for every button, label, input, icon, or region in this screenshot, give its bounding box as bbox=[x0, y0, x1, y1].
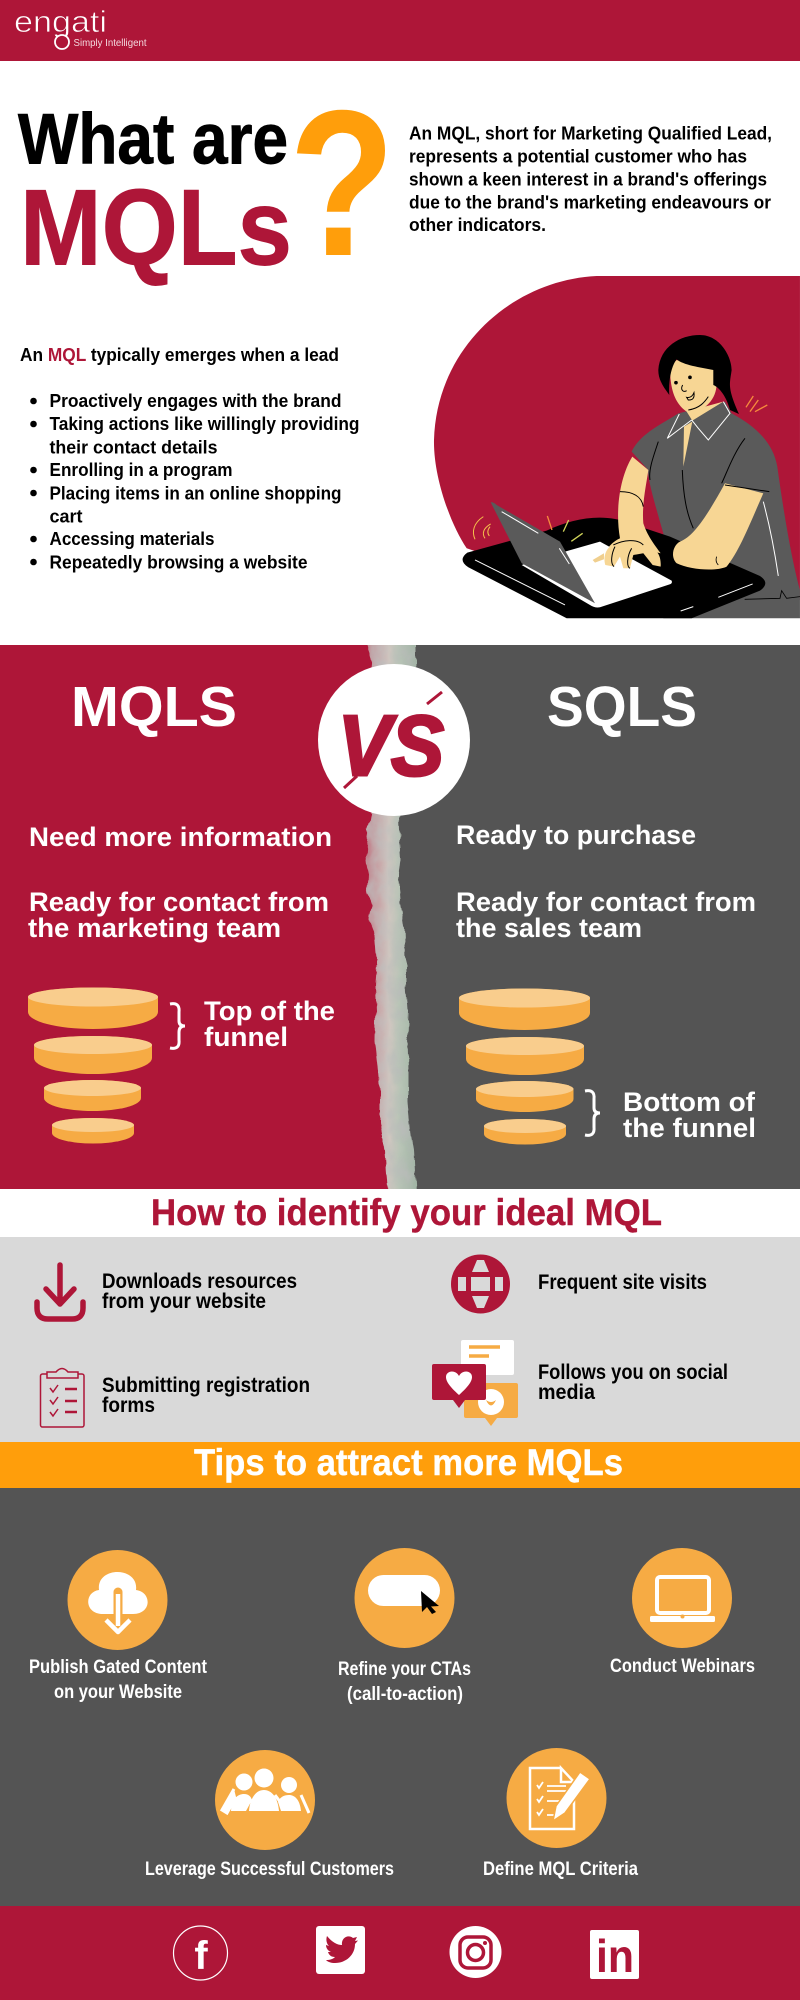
heading band: tips: Tips to attract more MQLs bbox=[194, 1442, 623, 1483]
logo: engati bbox=[14, 4, 147, 49]
red backdrop bbox=[434, 276, 800, 600]
table bbox=[463, 518, 765, 618]
definition paragraph: An MQL, short for Marketing Qualified Lead, bbox=[409, 124, 772, 144]
bullet list bbox=[30, 391, 359, 572]
tip: criteria bbox=[483, 1748, 638, 1880]
tip: criteria: Define MQL Criteria bbox=[483, 1859, 638, 1880]
icon: instagram bbox=[450, 1926, 502, 1978]
tip: gated content: Publish Gated Content bbox=[29, 1657, 208, 1678]
icon: facebook: f bbox=[194, 1934, 208, 1978]
tip: CTAs bbox=[338, 1548, 471, 1705]
arm left bbox=[605, 457, 661, 553]
title: ? bbox=[289, 68, 395, 300]
bullet list: Repeatedly browsing a website bbox=[50, 552, 308, 572]
tip: gated content bbox=[29, 1550, 208, 1703]
brace and label: top of the funnel: funnel bbox=[204, 1022, 288, 1052]
bullet list: Enrolling in a program bbox=[50, 460, 232, 480]
heading: MQLS: MQLS bbox=[71, 675, 237, 739]
text: downloads: Downloads resources bbox=[102, 1270, 297, 1293]
title: What are bbox=[18, 100, 288, 180]
tip: webinars: Conduct Webinars bbox=[610, 1656, 755, 1677]
funnel right bbox=[459, 988, 590, 1144]
panel: identify signals bbox=[0, 1237, 800, 1442]
tip: webinars bbox=[610, 1548, 755, 1677]
bullet list: Taking actions like willingly providing bbox=[50, 414, 360, 434]
text: social media: Follows you on social bbox=[538, 1361, 728, 1384]
SQL traits: Ready for contact from bbox=[456, 887, 756, 917]
bullet list: cart bbox=[50, 506, 82, 526]
MQL traits bbox=[28, 822, 332, 943]
brace and label: bottom of the funnel bbox=[585, 1087, 756, 1143]
VS badge: VS bbox=[338, 699, 444, 794]
illustration: woman working on a laptop bbox=[434, 276, 800, 618]
tip: gated content: on your Website bbox=[54, 1682, 182, 1703]
footer band with social icons bbox=[0, 1906, 800, 2000]
panel: tips bbox=[0, 1488, 800, 1906]
panel: MQLs vs SQLs bbox=[0, 640, 800, 1195]
text: downloads bbox=[102, 1270, 297, 1313]
bullet list: Proactively engages with the brand bbox=[50, 391, 342, 411]
SQL traits bbox=[456, 820, 756, 943]
text: social media bbox=[538, 1361, 728, 1404]
MQL traits: the marketing team bbox=[28, 913, 281, 943]
text: registration forms: Submitting registration bbox=[102, 1374, 310, 1397]
SQL traits: Ready to purchase bbox=[456, 820, 696, 850]
brace and label: bottom of the funnel: Bottom of bbox=[623, 1087, 756, 1117]
brace and label: top of the funnel: Top of the bbox=[204, 996, 335, 1026]
definition paragraph: represents a potential customer who has bbox=[409, 146, 747, 166]
collar bbox=[667, 402, 730, 440]
text: downloads: from your website bbox=[102, 1290, 266, 1313]
definition paragraph bbox=[409, 124, 772, 235]
text: registration forms: forms bbox=[102, 1394, 155, 1417]
tip: CTAs: Refine your CTAs bbox=[338, 1659, 471, 1680]
icon: globe bbox=[451, 1254, 510, 1314]
text: site visits: Frequent site visits bbox=[538, 1271, 707, 1294]
icon: twitter bbox=[316, 1926, 365, 1974]
heading: SQLS: SQLS bbox=[547, 675, 697, 739]
brace and label: top of the funnel bbox=[170, 996, 335, 1052]
heading: how to identify: How to identify your ideal MQL bbox=[151, 1192, 662, 1233]
icon: facebook bbox=[174, 1926, 228, 1980]
face bbox=[670, 360, 717, 412]
arm right bbox=[673, 483, 763, 570]
icon: linkedin: in bbox=[596, 1930, 634, 1982]
shirt bbox=[632, 402, 800, 618]
motion marks bbox=[473, 517, 491, 539]
hair bbox=[658, 335, 739, 414]
heading band: tips bbox=[0, 1442, 800, 1488]
text: social media: media bbox=[538, 1381, 595, 1404]
definition paragraph: due to the brand's marketing endeavours or bbox=[409, 192, 771, 212]
neck bbox=[683, 402, 723, 467]
tip: customers: Leverage Successful Customers bbox=[145, 1859, 394, 1880]
icon: clipboard bbox=[40, 1368, 84, 1427]
icon: social bubbles bbox=[432, 1340, 518, 1426]
definition paragraph: other indicators. bbox=[409, 215, 546, 235]
VS badge bbox=[318, 664, 470, 816]
tip: customers bbox=[145, 1750, 394, 1880]
laptop bbox=[491, 502, 595, 603]
text: registration forms bbox=[102, 1374, 310, 1417]
title bbox=[18, 68, 395, 300]
title: MQLs bbox=[20, 166, 292, 288]
definition paragraph: shown a keen interest in a brand's offerings bbox=[409, 170, 767, 190]
MQL traits: Ready for contact from bbox=[29, 887, 329, 917]
bullet list: Accessing materials bbox=[50, 529, 214, 549]
hand bbox=[604, 541, 661, 568]
funnel left bbox=[28, 988, 158, 1144]
MQL traits: Need more information bbox=[29, 822, 332, 852]
logo: engati: engati bbox=[14, 4, 107, 39]
bullet list: Placing items in an online shopping bbox=[50, 484, 342, 504]
logo: engati: Simply Intelligent bbox=[74, 38, 147, 49]
lead sentence: An MQL typically emerges when a lead bbox=[20, 345, 339, 365]
header band with logo bbox=[0, 0, 800, 61]
keyboard bbox=[522, 542, 672, 608]
tip: CTAs: (call-to-action) bbox=[347, 1684, 463, 1705]
bullet list: their contact details bbox=[50, 438, 218, 458]
SQL traits: the sales team bbox=[456, 913, 642, 943]
icon: download bbox=[37, 1265, 83, 1319]
torn paper divider bbox=[365, 640, 416, 1195]
brace and label: bottom of the funnel: the funnel bbox=[623, 1113, 756, 1143]
